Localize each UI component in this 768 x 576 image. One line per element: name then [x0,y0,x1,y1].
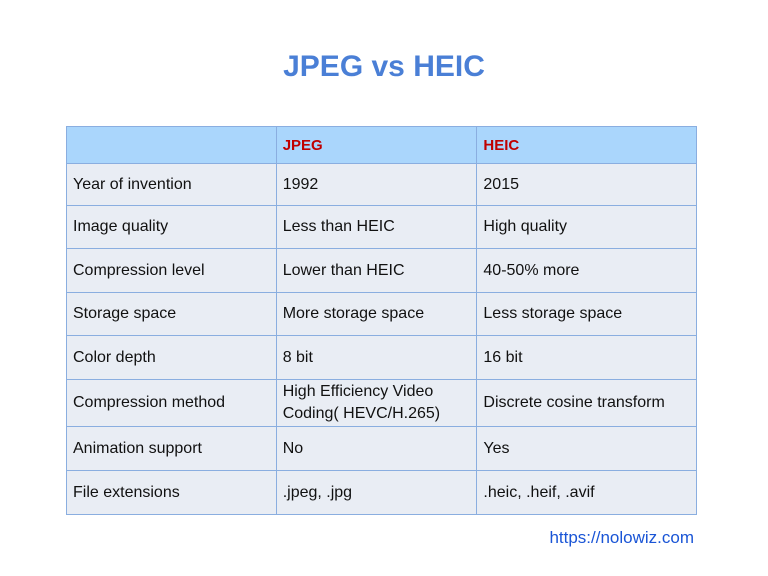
comparison table: .heic, .heif, .avif [483,484,595,500]
comparison table: Compression method [73,394,225,411]
comparison table: Lower than HEIC [283,262,405,278]
comparison table: Yes [483,440,510,456]
title: JPEG vs HEIC [283,50,485,83]
comparison table: Image quality [73,218,168,235]
comparison table: 16 bit [483,348,523,366]
comparison table: HEIC [483,136,519,154]
comparison table: No [283,440,303,456]
comparison table: 40-50% more [483,262,579,278]
comparison table: Animation support [73,440,202,456]
comparison table: Year of invention [73,176,192,192]
comparison table: High quality [483,218,567,235]
comparison table: File extensions [73,484,180,500]
comparison table: Discrete cosine transform [483,394,665,411]
comparison table: 8 bit [283,348,313,366]
comparison table: 1992 [283,176,318,192]
comparison table: Less storage space [483,305,622,322]
comparison table: Less than HEIC [283,218,395,235]
comparison table: More storage space [283,305,424,322]
source url: https://nolowiz.com [549,528,694,547]
comparison table: Storage space [73,305,176,322]
comparison table: JPEG [283,136,323,154]
comparison table: 2015 [483,176,519,192]
comparison table: Compression level [73,262,205,278]
comparison table: .jpeg, .jpg [283,484,352,500]
comparison table: Color depth [73,348,156,366]
comparison table [66,126,697,515]
comparison table: High Efficiency Video Coding( HEVC/H.265) [283,383,440,422]
